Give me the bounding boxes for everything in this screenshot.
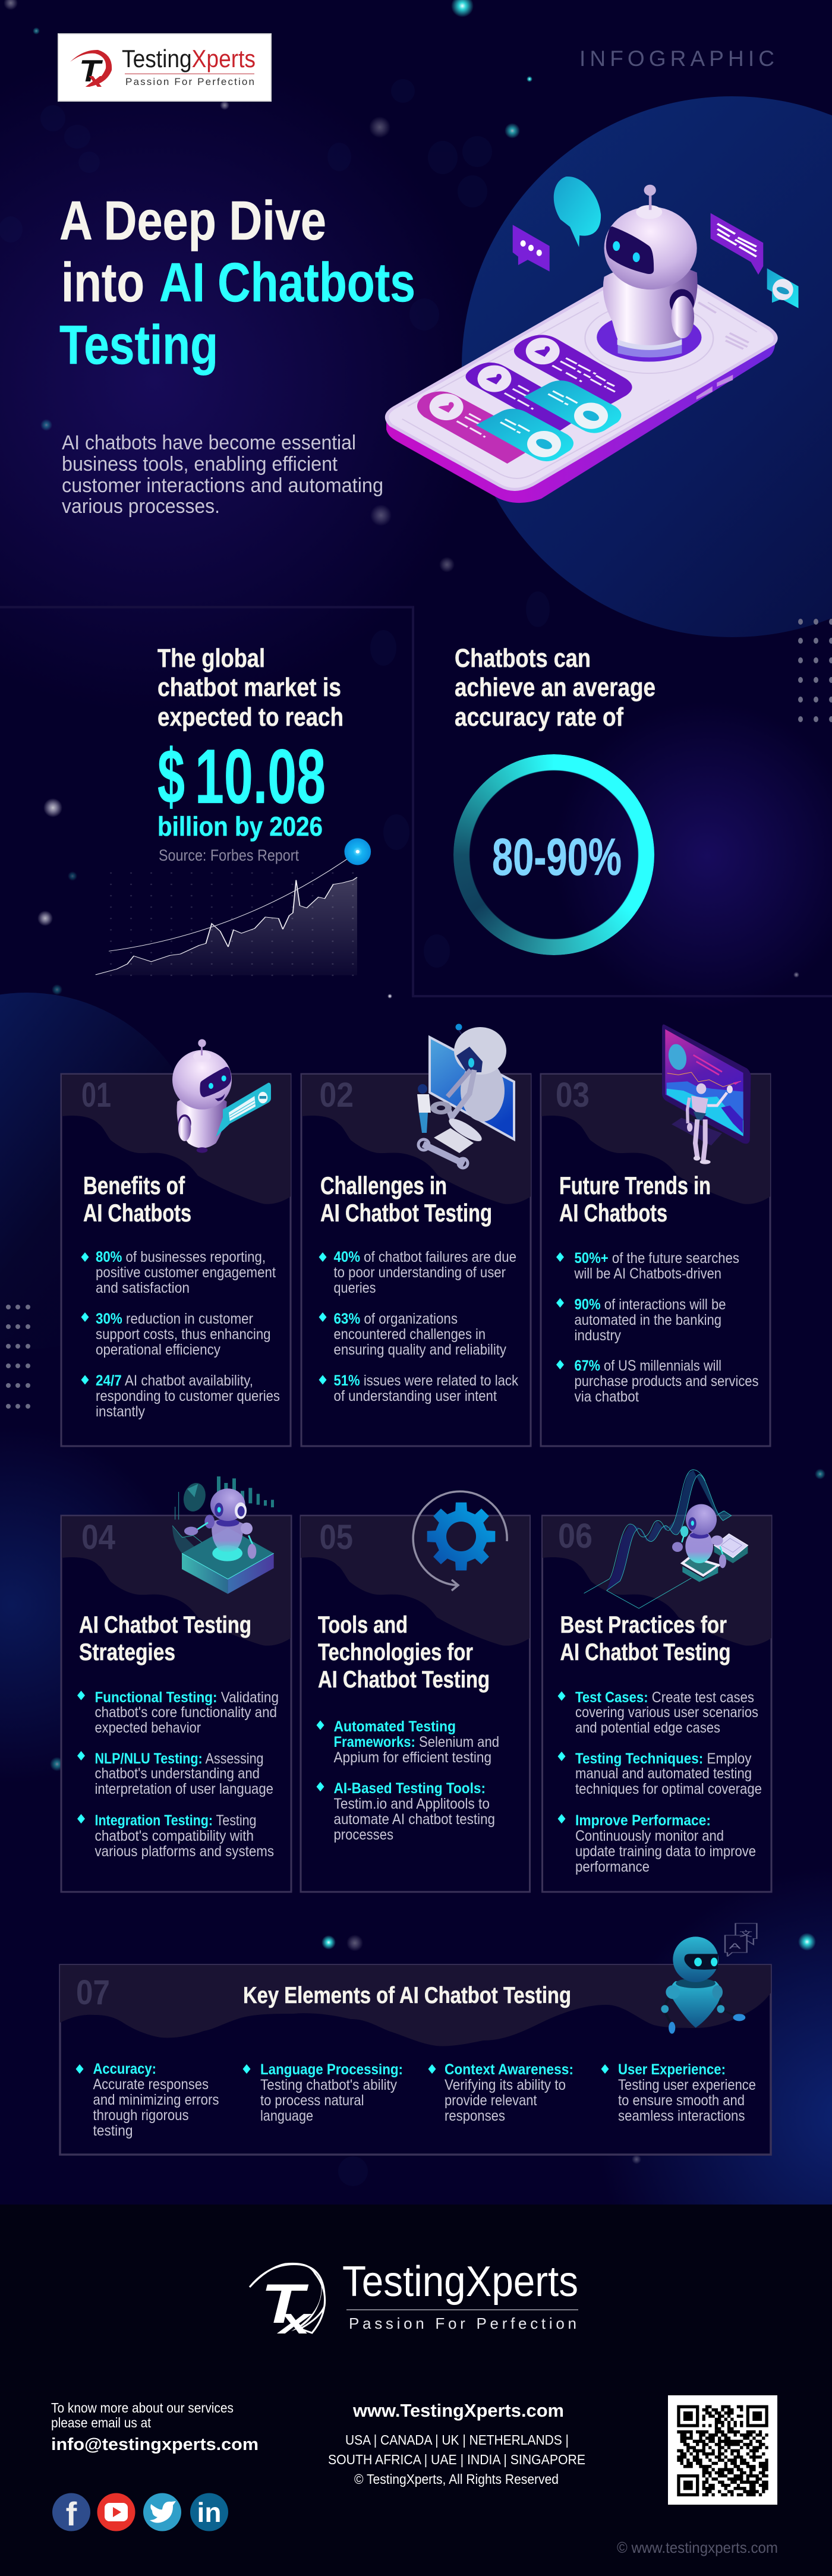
heading — [83, 1172, 191, 1227]
bullet automated testing frameworks: Automated Testing — [334, 1718, 456, 1735]
bullet 51%: 51% issues were related to lack — [334, 1372, 518, 1389]
number 01: 01 — [81, 1076, 111, 1114]
website and offices — [328, 2400, 585, 2487]
heading — [320, 1172, 492, 1227]
bullet integration testing: various platforms and systems — [95, 1843, 274, 1860]
icon: youtube — [97, 2493, 135, 2531]
bullet 30%: 30% reduction in customer — [96, 1311, 253, 1327]
market section frame — [0, 607, 832, 996]
logo: TestingXperts top: x — [85, 69, 105, 92]
line chart — [96, 838, 371, 978]
column: user experience: Testing user experience — [618, 2077, 756, 2093]
bullet NLP/NLU testing: chatbot's understanding and — [95, 1765, 260, 1782]
icon: linkedin: in — [197, 2497, 221, 2528]
bullet 63%: ensuring quality and reliability — [334, 1341, 506, 1358]
heading: AI Chatbot Testing — [320, 1199, 492, 1227]
robot — [603, 185, 698, 350]
column: accuracy: testing — [93, 2122, 133, 2139]
market text — [157, 644, 343, 864]
bullet AI-based testing tools: automate AI chatbot testing — [334, 1811, 495, 1828]
bullet improve performance: Improve Performace: — [575, 1812, 711, 1829]
column: accuracy — [76, 2061, 219, 2139]
logo: TestingXperts footer: TestingXperts — [342, 2258, 578, 2306]
column: accuracy: through rigorous — [93, 2107, 189, 2124]
bullet test cases: and potential edge cases — [575, 1720, 720, 1736]
bullet 24/7 — [81, 1372, 280, 1420]
bullet testing techniques — [557, 1750, 762, 1797]
bullet 67%: purchase products and services — [574, 1373, 758, 1390]
number 07: 07 — [76, 1973, 110, 2012]
heading: Challenges in — [320, 1172, 447, 1199]
bullet 63%: encountered challenges in — [334, 1326, 486, 1343]
intro text: customer interactions and automating — [62, 474, 383, 497]
bullet 51% — [319, 1372, 518, 1404]
bullet 67% — [556, 1358, 758, 1405]
column: language processing — [242, 2061, 403, 2124]
hole and ring — [585, 303, 713, 373]
bullet NLP/NLU testing: interpretation of user language — [95, 1781, 273, 1797]
bullet 50%+ — [556, 1250, 739, 1282]
column: context awareness: Verifying its ability to — [445, 2077, 566, 2093]
bullet test cases: covering various user scenarios — [575, 1704, 758, 1721]
icon: robot with wave graph — [584, 1470, 748, 1608]
contact text: To know more about our services — [51, 2400, 234, 2416]
logo: TestingXperts footer: T — [261, 2272, 310, 2335]
intro text: business tools, enabling efficient — [62, 453, 338, 475]
icon: facebook — [52, 2493, 90, 2533]
bullet AI-based testing tools: Testim.io and Applitools to — [334, 1796, 490, 1812]
website and offices: USA | CANADA | UK | NETHERLANDS | — [345, 2432, 569, 2448]
bullet 90%: automated in the banking — [574, 1312, 721, 1328]
bullet 24/7: 24/7 AI chatbot availability, — [96, 1372, 253, 1389]
column: user experience: to ensure smooth and — [618, 2092, 745, 2109]
bullet NLP/NLU testing: NLP/NLU Testing: Assessing — [95, 1750, 264, 1767]
column: language processing: Testing chatbot's ability — [260, 2077, 397, 2093]
website and offices: © TestingXperts, All Rights Reserved — [354, 2471, 559, 2487]
heading — [559, 1172, 711, 1227]
bullet 67%: via chatbot — [574, 1388, 639, 1405]
bullet NLP/NLU testing — [77, 1750, 273, 1797]
column: user experience: seamless interactions — [618, 2108, 745, 2124]
number 05: 05 — [320, 1518, 353, 1557]
logo: TestingXperts top: TestingXperts — [122, 45, 256, 73]
bullet 90% — [556, 1296, 726, 1344]
heading: AI Chatbot Testing — [560, 1639, 731, 1665]
hero illustration: phone with robot — [386, 177, 798, 503]
logo: TestingXperts top: T — [79, 54, 103, 89]
number 03: 03 — [556, 1076, 590, 1114]
accuracy text: accuracy rate of — [455, 703, 623, 732]
icon: twitter — [143, 2493, 181, 2531]
market text: billion by 2026 — [157, 811, 323, 842]
number 02: 02 — [320, 1076, 354, 1114]
dot grid left — [6, 1305, 30, 1409]
column: user experience — [601, 2061, 756, 2124]
accuracy value: 80-90% — [492, 827, 622, 886]
title: into — [61, 251, 144, 313]
bullet 50%+: will be AI Chatbots-driven — [574, 1265, 721, 1282]
bullet improve performance: performance — [575, 1859, 650, 1875]
column: context awareness — [428, 2061, 573, 2124]
column: language processing: to process natural — [260, 2092, 364, 2109]
number 06: 06 — [558, 1517, 593, 1555]
chat message rows — [417, 335, 632, 464]
market text: The global — [157, 644, 265, 673]
panel 04: strategies — [61, 1516, 291, 1892]
intro text: AI chatbots have become essential — [62, 432, 356, 454]
heading: Strategies — [79, 1639, 175, 1665]
column: context awareness: provide relevant — [445, 2092, 537, 2109]
bullet integration testing: chatbot's compatibility with — [95, 1828, 254, 1844]
phone body — [386, 260, 776, 503]
bullet 40%: queries — [334, 1280, 376, 1296]
bullet 80%: 80% of businesses reporting, — [96, 1249, 266, 1265]
accuracy text: achieve an average — [455, 673, 655, 702]
logo: TestingXperts footer: x — [276, 2301, 313, 2342]
bullet testing techniques: Testing Techniques: Employ — [575, 1750, 752, 1767]
icon: translator robot — [661, 1923, 757, 2034]
bullet functional testing: expected behavior — [95, 1720, 201, 1736]
bullet testing techniques: techniques for optimal coverage — [575, 1781, 762, 1797]
heading: AI Chatbots — [83, 1199, 191, 1227]
icon: linkedin — [190, 2493, 228, 2531]
column: language processing: language — [260, 2108, 313, 2124]
bullet 80%: positive customer engagement — [96, 1264, 276, 1281]
bullet 90%: industry — [574, 1327, 621, 1344]
heading — [560, 1612, 731, 1665]
social icons — [52, 2493, 228, 2533]
column: accuracy: Accuracy: — [93, 2061, 156, 2077]
bullet 40%: to poor understanding of user — [334, 1264, 506, 1281]
bullet improve performance: update training data to improve — [575, 1843, 756, 1860]
title: AI Chatbots — [159, 251, 415, 313]
bullet improve performance: Continuously monitor and — [575, 1828, 724, 1844]
icon: robot on data platform — [172, 1476, 274, 1594]
column: language processing: Language Processing: — [260, 2061, 403, 2078]
logo: TestingXperts footer — [250, 2258, 578, 2342]
market text: Source: Forbes Report — [159, 846, 299, 864]
heading: Tools and — [318, 1612, 408, 1638]
footer background — [0, 2205, 832, 2576]
bullet improve performance — [557, 1812, 756, 1875]
market text: expected to reach — [157, 703, 343, 732]
heading: Technologies for — [318, 1639, 473, 1665]
icon: gear with rotating arrow — [413, 1491, 507, 1591]
bullet AI-based testing tools — [316, 1780, 495, 1843]
market text: chatbot market is — [157, 673, 341, 702]
bullet 40%: 40% of chatbot failures are due — [334, 1249, 516, 1265]
bullet test cases — [557, 1689, 758, 1736]
copyright url: © www.testingxperts.com — [617, 2539, 778, 2556]
panel 03: future trends — [541, 1074, 770, 1446]
bullet 63%: 63% of organizations — [334, 1311, 458, 1327]
bullet 30%: operational efficiency — [96, 1341, 220, 1358]
panel 06: best practices — [542, 1516, 771, 1892]
icon: translator robot: A — [729, 1942, 741, 1950]
panel 07: key elements — [60, 1965, 771, 2155]
number 04: 04 — [81, 1518, 115, 1557]
bullet 50%+: 50%+ of the future searches — [574, 1250, 739, 1267]
heading: Benefits of — [83, 1172, 185, 1199]
logo: TestingXperts top — [58, 34, 271, 101]
bullet 67%: 67% of US millennials will — [574, 1358, 721, 1374]
heading: AI Chatbots — [559, 1199, 667, 1227]
bullet 90%: 90% of interactions will be — [574, 1296, 726, 1313]
dot grid top right — [798, 619, 832, 722]
intro text: various processes. — [62, 495, 220, 518]
bullet 80%: and satisfaction — [96, 1280, 190, 1296]
website and offices: www.TestingXperts.com — [352, 2400, 564, 2421]
bullet 24/7: responding to customer queries — [96, 1388, 280, 1404]
heading: Future Trends in — [559, 1172, 711, 1199]
bullet 51%: of understanding user intent — [334, 1388, 497, 1404]
heading: AI Chatbot Testing — [318, 1667, 490, 1693]
accuracy text: Chatbots can — [455, 644, 591, 673]
bullet functional testing: Functional Testing: Validating — [95, 1689, 279, 1706]
bullet 30% — [81, 1311, 271, 1358]
panel 02: challenges — [301, 1074, 531, 1446]
icon: translator robot: 文 — [739, 1929, 752, 1938]
bullet AI-based testing tools: processes — [334, 1826, 393, 1843]
heading — [79, 1612, 251, 1665]
column: context awareness: Context Awareness: — [445, 2061, 573, 2078]
panel 01: benefits — [61, 1074, 291, 1446]
website and offices: SOUTH AFRICA | UAE | INDIA | SINGAPORE — [328, 2452, 585, 2467]
bullet 63% — [319, 1311, 506, 1358]
bullet 24/7: instantly — [96, 1403, 145, 1420]
market text: 10.08 — [195, 733, 326, 820]
intro text — [62, 432, 383, 518]
column: accuracy: Accurate responses — [93, 2076, 209, 2093]
title: Testing — [59, 314, 218, 376]
bullet 30%: support costs, thus enhancing — [96, 1326, 271, 1343]
logo: TestingXperts top: Passion For Perfection — [125, 76, 254, 87]
chat bubbles floating — [513, 177, 798, 308]
column: accuracy: and minimizing errors — [93, 2092, 219, 2108]
bullet integration testing: Integration Testing: Testing — [95, 1812, 257, 1829]
bullet automated testing frameworks: Frameworks: Selenium and — [334, 1734, 499, 1750]
bullet functional testing — [77, 1689, 279, 1736]
bullet AI-based testing tools: AI-Based Testing Tools: — [334, 1780, 486, 1797]
heading: Key Elements of AI Chatbot Testing — [243, 1983, 571, 2008]
contact text: info@testingxperts.com — [51, 2435, 259, 2454]
panel 05: tools — [301, 1516, 530, 1892]
accuracy ring — [453, 754, 654, 955]
icon: robot with chat panel — [172, 1039, 271, 1153]
heading: AI Chatbot Testing — [79, 1612, 251, 1638]
title: A Deep Dive — [59, 190, 326, 251]
icon: android and data screen — [662, 1024, 751, 1164]
QR code — [668, 2395, 777, 2505]
column: context awareness: responses — [445, 2108, 505, 2124]
bullet 40% — [319, 1249, 516, 1296]
title — [59, 190, 415, 376]
bullet test cases: Test Cases: Create test cases — [575, 1689, 754, 1706]
label: INFOGRAPHIC: INFOGRAPHIC — [579, 46, 774, 71]
bullet 80% — [81, 1249, 276, 1296]
market text: $ — [157, 733, 185, 820]
column: user experience: User Experience: — [618, 2061, 726, 2078]
logo: TestingXperts footer: Passion For Perfection — [349, 2314, 576, 2332]
heading: Best Practices for — [560, 1612, 727, 1638]
accuracy text — [455, 644, 655, 732]
contact text — [51, 2400, 259, 2454]
heading — [318, 1612, 490, 1693]
contact text: please email us at — [51, 2415, 152, 2430]
bullet automated testing frameworks — [316, 1718, 499, 1766]
bullet functional testing: chatbot's core functionality and — [95, 1704, 277, 1721]
bullet testing techniques: manual and automated testing — [575, 1765, 752, 1782]
icon: facebook: f — [66, 2495, 77, 2533]
bullet integration testing — [77, 1812, 274, 1860]
bullet automated testing frameworks: Appium for efficient testing — [334, 1749, 491, 1766]
icon: robot repair on monitor — [417, 1024, 514, 1168]
